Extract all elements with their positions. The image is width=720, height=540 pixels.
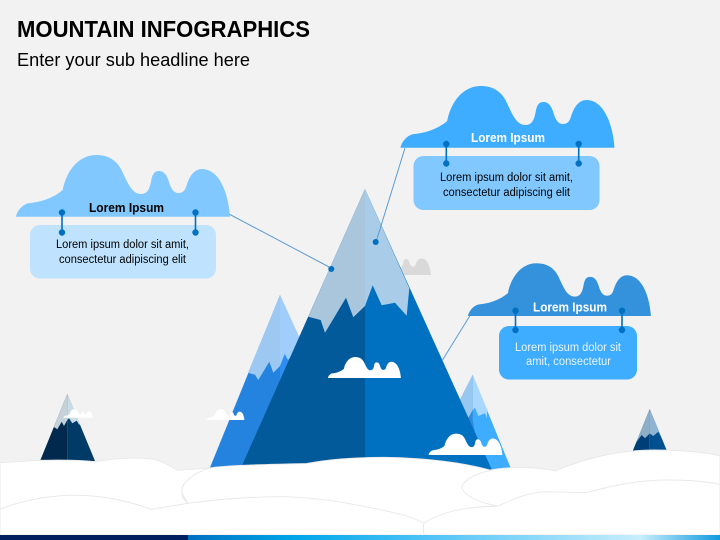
leader line to main mountain — [376, 148, 405, 242]
text box — [499, 326, 637, 380]
leader dot — [328, 266, 334, 272]
body text: Lorem ipsum dolor sit — [515, 342, 622, 354]
snow hills foreground — [0, 450, 720, 535]
body text: Lorem ipsum dolor sit amit, — [56, 239, 189, 251]
panel: right callout — [442, 263, 651, 380]
connectors — [513, 308, 624, 332]
subtitle: Enter your sub headline here — [17, 49, 250, 70]
connectors — [444, 142, 581, 166]
icon: small white cloud on left peak — [63, 409, 93, 418]
body text — [440, 172, 573, 199]
back-left mountain — [209, 295, 340, 470]
small left mountain — [40, 394, 95, 461]
leader dot — [373, 239, 379, 245]
cloud shape — [16, 155, 230, 217]
icon: small white cloud lower left of main mountain — [207, 409, 244, 420]
connectors — [60, 210, 198, 235]
body text: consectetur adipiscing elit — [443, 187, 571, 199]
body text: Lorem ipsum dolor sit amit, — [440, 172, 573, 184]
heading: Lorem Ipsum — [471, 131, 545, 145]
body text: consectetur adipiscing elit — [59, 254, 187, 266]
body text — [515, 342, 622, 368]
main mountain — [240, 189, 492, 470]
cloud shape — [468, 263, 651, 316]
back-right mountain — [458, 375, 512, 470]
icon: white cloud lower right — [429, 434, 502, 455]
heading: Lorem Ipsum — [89, 201, 164, 215]
icon: white cloud on main mountain — [328, 357, 401, 378]
text box — [414, 156, 600, 210]
body text — [56, 239, 189, 266]
leader line to main mountain — [442, 314, 471, 360]
text box — [30, 225, 216, 278]
icon: gray cloud behind main mountain — [356, 253, 431, 275]
bottom colour bar — [0, 535, 720, 540]
panel: left callout — [16, 155, 334, 278]
cloud shape — [400, 86, 614, 148]
body text: amit, consectetur — [526, 356, 611, 368]
small right mountain — [633, 409, 667, 451]
title: MOUNTAIN INFOGRAPHICS — [17, 16, 310, 42]
leader line to main mountain — [229, 214, 331, 268]
heading: Lorem Ipsum — [533, 300, 607, 314]
panel: top callout — [373, 86, 614, 245]
